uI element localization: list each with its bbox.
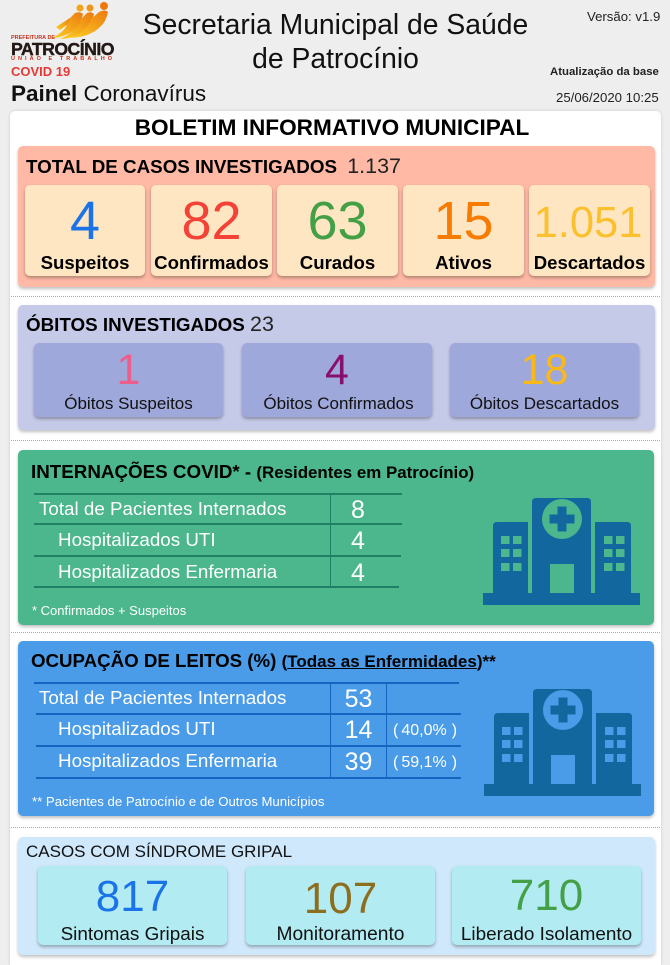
icon: hospital: [483, 498, 640, 605]
card: obitos suspeitos: Óbitos Suspeitos: [64, 394, 193, 413]
footnote: internacoes: * Confirmados + Suspeitos: [32, 603, 186, 618]
card: curados: [277, 185, 398, 276]
card: curados: 63: [307, 191, 368, 251]
card: ativos: Ativos: [435, 252, 492, 273]
card: confirmados: [151, 185, 272, 276]
panel: sindrome gripal: [18, 837, 655, 955]
row: enfermaria: Hospitalizados Enfermaria: [58, 561, 277, 582]
heading: internacoes: INTERNAÇÕES COVID* - (Residentes em Patrocínio): [31, 461, 474, 482]
value: total: 53: [345, 685, 372, 713]
covid label: COVID 19: [11, 64, 70, 79]
logo: [11, 2, 115, 62]
card: suspeitos: 4: [70, 191, 100, 251]
card: descartados: [529, 185, 650, 276]
card: suspeitos: [25, 185, 145, 276]
icon: orange figures: [52, 2, 108, 39]
value: total: 8: [351, 496, 365, 524]
card: obitos suspeitos: 1: [117, 346, 140, 394]
row: enfermaria: Hospitalizados Enfermaria: [58, 750, 277, 771]
row: uti: Hospitalizados UTI: [58, 529, 216, 550]
card: obitos descartados: Óbitos Descartados: [470, 394, 619, 413]
panel title: Painel Coronavírus: [11, 81, 206, 106]
main title: Secretaria Municipal de Saúde: [143, 8, 528, 40]
card: ativos: 15: [433, 191, 494, 251]
logo small text: PREFEITURA DE: [11, 35, 55, 41]
bulletin heading: BOLETIM INFORMATIVO MUNICIPAL: [135, 115, 529, 140]
card: sintomas gripais: 817: [96, 872, 169, 921]
percent: uti: (: [393, 722, 398, 739]
value: enfermaria: 4: [351, 559, 365, 587]
version: Versão: v1.9: [587, 9, 660, 24]
update date: 25/06/2020 10:25: [556, 90, 659, 105]
row: total: Total de Pacientes Internados: [39, 687, 286, 708]
row: uti: Hospitalizados UTI: [58, 718, 216, 739]
panel: total de casos: [18, 146, 655, 287]
card: obitos suspeitos: [34, 343, 223, 417]
card: monitoramento: [246, 866, 435, 945]
main title: de Patrocínio: [252, 42, 419, 74]
percent: uti: ): [452, 722, 457, 739]
table: internacoes: [34, 493, 402, 588]
footnote: ocupacao: ** Pacientes de Patrocínio e de Outros Municípios: [32, 794, 324, 809]
card: obitos confirmados: [242, 343, 432, 417]
card: obitos descartados: [450, 343, 639, 417]
card: ativos: [403, 185, 524, 276]
card: curados: Curados: [300, 252, 375, 273]
card: monitoramento: Monitoramento: [276, 924, 404, 945]
logo name: PATROCÍNIO: [11, 39, 114, 59]
percent: enfermaria: ): [452, 754, 457, 771]
card: liberado isolamento: Liberado Isolamento: [461, 924, 632, 945]
panel: internacoes: [18, 450, 654, 625]
heading: sindrome gripal: CASOS COM SÍNDROME GRIPAL: [26, 842, 292, 861]
heading: ocupacao: OCUPAÇÃO DE LEITOS (%) (Todas as Enfermidades)**: [31, 650, 496, 671]
icon: hospital: [484, 689, 641, 796]
card: suspeitos: Suspeitos: [41, 252, 129, 273]
card: liberado isolamento: 710: [510, 871, 583, 920]
update label: Atualização da base: [550, 66, 659, 78]
main title: [143, 8, 528, 74]
panel: ocupacao de leitos: [18, 641, 654, 816]
value: uti: 14: [345, 716, 372, 744]
value: uti: 4: [351, 527, 365, 555]
row: total: Total de Pacientes Internados: [39, 498, 286, 519]
card: monitoramento: 107: [304, 874, 377, 923]
card: confirmados: Confirmados: [154, 252, 269, 273]
percent: enfermaria: 59,1%: [401, 754, 447, 771]
card: confirmados: 82: [181, 191, 242, 251]
percent: enfermaria: (: [393, 754, 398, 771]
value: enfermaria: 39: [345, 748, 372, 776]
heading: total de casos: TOTAL DE CASOS INVESTIGADOS 1.137: [26, 154, 401, 178]
card: descartados: 1.051: [534, 199, 642, 247]
card: sintomas gripais: Sintomas Gripais: [61, 924, 204, 945]
card: obitos descartados: 18: [521, 346, 568, 394]
heading: obitos: ÓBITOS INVESTIGADOS 23: [26, 312, 274, 336]
card: sintomas gripais: [38, 866, 227, 945]
logo motto: UNIÃO E TRABALHO: [11, 56, 115, 62]
card: descartados: Descartados: [534, 252, 645, 273]
card: liberado isolamento: [452, 866, 641, 945]
card: obitos confirmados: Óbitos Confirmados: [263, 394, 414, 413]
percent: uti: 40,0%: [401, 722, 447, 739]
table: ocupacao: [34, 682, 461, 779]
card: obitos confirmados: 4: [325, 346, 349, 394]
panel: obitos: [18, 305, 655, 430]
